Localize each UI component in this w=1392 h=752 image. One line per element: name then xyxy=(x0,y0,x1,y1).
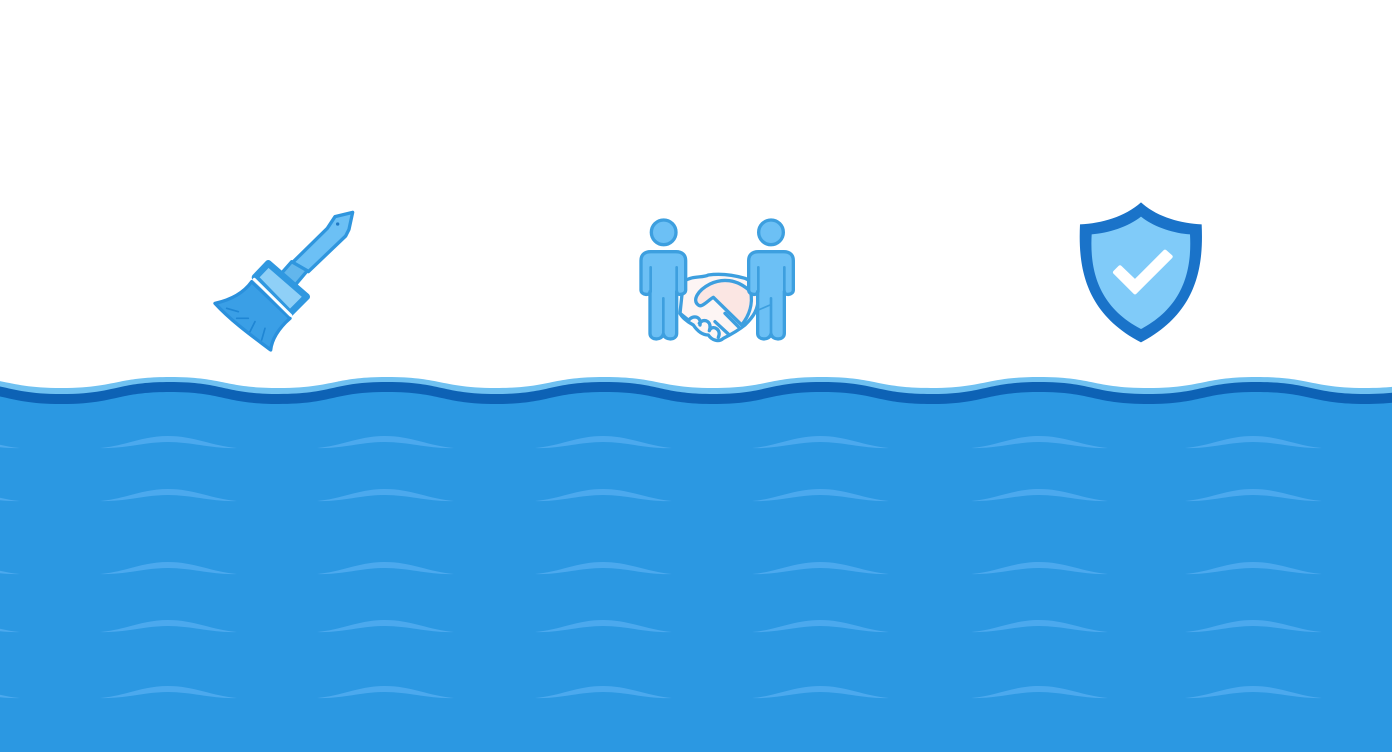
ripple row 2 xyxy=(0,489,1322,501)
water: dark band xyxy=(0,382,1392,752)
ripple row 4 xyxy=(0,620,1322,632)
ripple row 5 xyxy=(0,686,1322,698)
icon: shield with check mark xyxy=(1080,202,1202,342)
person right xyxy=(749,220,793,339)
handshake xyxy=(680,274,758,341)
ripple row 1 xyxy=(0,436,1322,448)
icon: paint brush xyxy=(215,212,353,350)
water: body xyxy=(0,392,1392,752)
person left xyxy=(641,220,686,339)
icon: two people shaking hands xyxy=(641,220,793,341)
ripple row 3 xyxy=(0,562,1322,574)
water: light crest xyxy=(0,377,1392,752)
